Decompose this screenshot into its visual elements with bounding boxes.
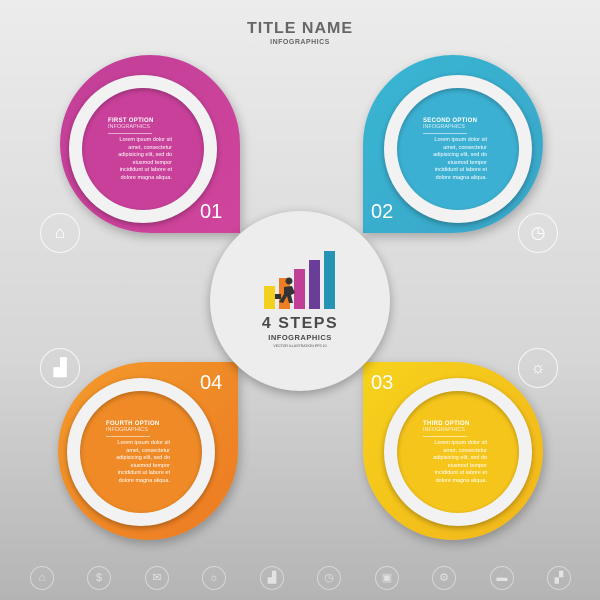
center circle (210, 211, 390, 391)
panel: second option: 02 (371, 201, 393, 223)
bottom icon row: $ (96, 572, 102, 584)
panel: first option: Lorem ipsum dolor sit amet, consectetur adipisicing elit, sed do eiusmod tempor incididunt ut labore et dolore magna aliqua. (118, 137, 172, 180)
icon: home (40, 213, 80, 253)
panel: fourth option: FOURTH OPTION (106, 421, 160, 427)
panel: fourth option: Lorem ipsum dolor sit amet, consectetur adipisicing elit, sed do eiusmod tempor incididunt ut labore et dolore magna aliqua. (116, 440, 170, 484)
center text: VECTOR ILLUSTRATION EPS 10 (273, 344, 327, 348)
panel: fourth option (58, 362, 238, 540)
icon: chart: ▟ (53, 358, 67, 377)
title (247, 20, 353, 46)
bottom icon row: ▟ (268, 572, 276, 584)
panel: second option (363, 55, 543, 233)
bar chart icon (264, 251, 335, 309)
bottom icon row: ✉ (152, 572, 162, 584)
panel: third option: THIRD OPTION (423, 421, 470, 427)
panel: second option: INFOGRAPHICS (423, 124, 465, 130)
icon: clock (518, 213, 558, 253)
panel: fourth option: INFOGRAPHICS (106, 427, 148, 433)
icon: bulb (518, 348, 558, 388)
bottom icon row: ⚙ (439, 572, 449, 584)
bottom icon row: ▣ (382, 572, 392, 584)
panel: first option: FIRST OPTION (108, 118, 154, 124)
icon: bulb: ☼ (530, 358, 546, 377)
title: INFOGRAPHICS (270, 39, 330, 46)
panel: second option: Lorem ipsum dolor sit amet, consectetur adipisicing elit, sed do eiusmod tempor incididunt ut labore et dolore magna aliqua. (433, 137, 487, 180)
panel: third option: Lorem ipsum dolor sit amet, consectetur adipisicing elit, sed do eiusmod tempor incididunt ut labore et dolore magna aliqua. (433, 440, 487, 484)
icon: chart (40, 348, 80, 388)
bottom icon row: ◷ (324, 572, 334, 584)
icon: home: ⌂ (55, 223, 65, 242)
panel: second option: SECOND OPTION (423, 118, 477, 124)
bottom icon row: ☼ (209, 572, 219, 584)
panel: third option (363, 362, 543, 540)
bottom icon row: ▞ (555, 572, 563, 584)
panel: first option (60, 55, 240, 233)
panel: fourth option: 04 (200, 372, 222, 394)
panel: third option: 03 (371, 372, 393, 394)
panel: first option: INFOGRAPHICS (108, 124, 150, 130)
panel: first option: 01 (200, 201, 222, 223)
bottom icon row: ⌂ (39, 572, 45, 584)
panel: third option: INFOGRAPHICS (423, 427, 465, 433)
title: TITLE NAME (247, 20, 353, 37)
center text (262, 315, 338, 348)
bottom icon row: ▬ (496, 572, 508, 584)
center text: INFOGRAPHICS (268, 333, 332, 342)
icon: clock: ◷ (531, 223, 545, 242)
center text: 4 STEPS (262, 315, 338, 332)
